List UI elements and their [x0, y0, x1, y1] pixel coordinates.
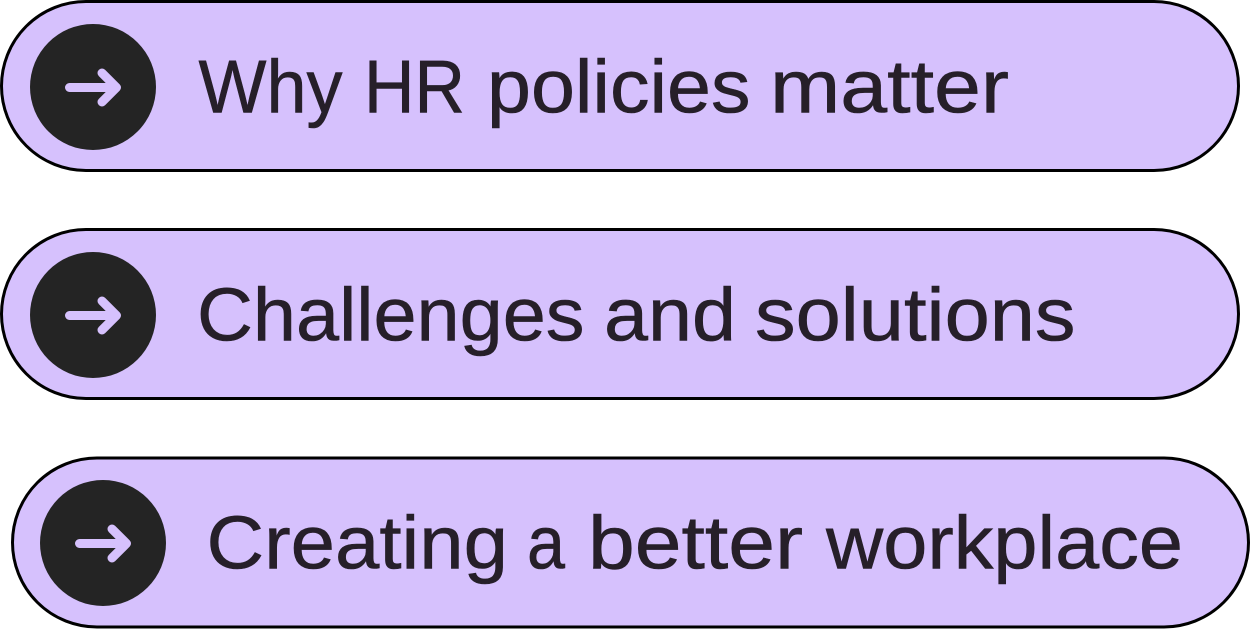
label: a: [527, 500, 565, 584]
pill: Why HR policies matter: [2, 2, 1238, 170]
label: policies: [487, 44, 750, 128]
label: Why: [198, 44, 343, 128]
label: solutions: [755, 272, 1076, 356]
label: matter: [770, 44, 1009, 128]
label: [197, 272, 1076, 356]
label: HR: [364, 44, 465, 128]
pill: Challenges and solutions: [2, 230, 1238, 398]
label: [198, 44, 1009, 128]
icon: arrow in dark circle: [40, 480, 166, 606]
pill background: [2, 230, 1238, 398]
pill background: [12, 458, 1248, 627]
pill background: [2, 2, 1238, 170]
icon: arrow in dark circle: [30, 252, 156, 378]
label: and: [604, 272, 736, 356]
label: [206, 500, 1183, 584]
icon: arrow in dark circle: [30, 24, 156, 150]
pill: Creating a better workplace: [12, 458, 1248, 627]
label: workplace: [825, 500, 1183, 584]
label: better: [588, 500, 803, 584]
label: Creating: [206, 500, 508, 584]
label: Challenges: [197, 272, 584, 356]
